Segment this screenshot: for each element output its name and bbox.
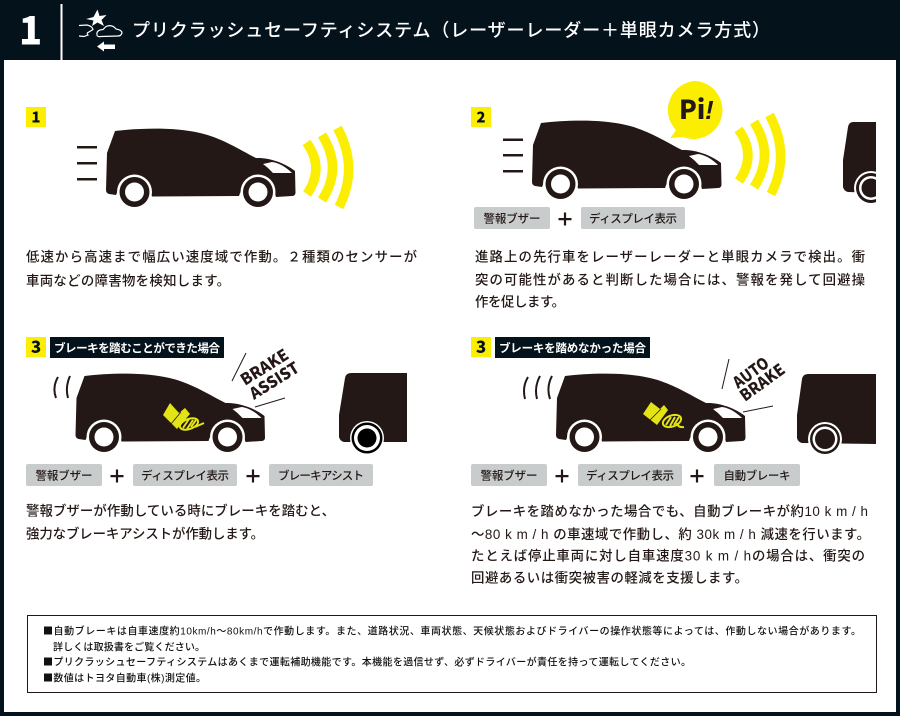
panel: step 2 [471, 81, 888, 310]
tag: auto brake: 自動ブレーキ [724, 468, 790, 482]
speed lines [503, 138, 523, 172]
pedal icon [163, 403, 204, 432]
panel: step 1 [26, 106, 418, 288]
tag: display [578, 464, 682, 486]
speech bubble: Pi!: Pi [679, 90, 705, 127]
speech bubble: Pi! [668, 81, 722, 139]
subheading: ブレーキを踏むことができた場合 [54, 341, 220, 355]
description: ブレーキを踏めなかった場合でも、自動ブレーキが約10 k m / h [471, 503, 868, 519]
AUTO BRAKE label [722, 350, 789, 412]
description: 強力なブレーキアシストが作動します。 [26, 526, 264, 542]
section number: 1 [19, 0, 42, 56]
badge 2 [471, 106, 491, 128]
tag: alarm buzzer: 警報ブザー [480, 468, 538, 482]
subheading [495, 337, 650, 358]
description [26, 502, 335, 542]
description: 車両などの障害物を検知します。 [26, 272, 230, 288]
BRAKE ASSIST label: ASSIST [243, 355, 303, 405]
icon: pre-crash system [79, 10, 122, 52]
car [556, 374, 746, 454]
plus [246, 470, 260, 482]
badge 3 [471, 333, 491, 358]
badge 3: 3 [476, 333, 486, 358]
badge 1 [26, 106, 46, 128]
tag: auto brake [714, 464, 800, 486]
tag: display [133, 464, 237, 486]
panel: step 3 brake not applied [471, 333, 880, 586]
tag: alarm buzzer: 警報ブザー [36, 468, 92, 482]
tag: brake assist: ブレーキアシスト [278, 468, 364, 482]
pedal icon [643, 402, 684, 429]
title: プリクラッシュセーフティシステム（レーザーレーダー＋単眼カメラ方式） [132, 20, 770, 40]
description: 作を促します。 [475, 294, 565, 310]
plus [110, 470, 124, 482]
AUTO BRAKE label: AUTO [726, 350, 773, 394]
vehicle ahead [797, 374, 880, 456]
notes box: 詳しくは取扱書をご覧ください。 [53, 640, 205, 654]
BRAKE ASSIST label: BRAKE [235, 342, 293, 390]
badge 1: 1 [31, 106, 41, 128]
car [76, 374, 265, 454]
plus [556, 470, 568, 482]
description: 回避あるいは衝突被害の軽減を支援します。 [471, 570, 748, 586]
tag: brake assist [269, 464, 373, 486]
badge 3 [26, 333, 46, 358]
subheading: ブレーキを踏めなかった場合 [499, 341, 646, 355]
badge 2: 2 [476, 106, 486, 128]
tag: alarm buzzer: 警報ブザー [484, 212, 540, 226]
speech bubble: Pi!: ! [705, 95, 714, 125]
plus [690, 470, 704, 482]
car [106, 129, 296, 210]
BRAKE ASSIST label [232, 342, 303, 407]
tag: display: ディスプレイ表示 [589, 212, 677, 226]
tag: display [581, 207, 685, 229]
description [471, 503, 870, 586]
vehicle ahead [843, 122, 876, 203]
tag: alarm buzzer [26, 464, 102, 486]
AUTO BRAKE label: BRAKE [734, 357, 789, 406]
description: 進路上の先行車をレーザーレーダーと単眼カメラで検出。衝 [475, 248, 865, 264]
car [532, 121, 722, 202]
notes box: ■数値はトヨタ自動車(株)測定値。 [43, 670, 206, 684]
badge 3: 3 [31, 333, 41, 358]
description: ～80 k m / h の車速域で作動し、約 30k m / h 減速を行います。 [471, 526, 870, 542]
motion arcs [524, 376, 552, 399]
subheading [50, 337, 224, 358]
tag: alarm buzzer [474, 207, 550, 229]
description [475, 248, 866, 310]
tag: display: ディスプレイ表示 [141, 468, 229, 482]
notes box: ■プリクラッシュセーフティシステムはあくまで運転補助機能です。本機能を過信せず、必ずドライバーが責任を持って運転してください。 [43, 654, 691, 668]
motion arcs [54, 376, 70, 398]
notes box: ■自動ブレーキは自車速度約10km/h～80km/hで作動します。また、道路状況、車両状態、天候状態およびドライバーの操作状態等によっては、作動しない場合があります。 [43, 622, 861, 638]
speed lines [77, 146, 97, 180]
tag: display: ディスプレイ表示 [586, 468, 674, 482]
header bar [19, 0, 770, 60]
plus [558, 212, 572, 226]
panel: step 3 brake applied [26, 333, 407, 542]
radar waves [306, 128, 349, 207]
tag: alarm buzzer [471, 464, 547, 486]
description: 警報ブザーが作動している時にブレーキを踏むと、 [26, 502, 335, 518]
radar waves [738, 115, 781, 194]
description: 突の可能性があると判断した場合には、警報を発して回避操 [475, 272, 866, 288]
description [26, 248, 418, 288]
vehicle ahead [339, 373, 407, 455]
description: たとえば停止車両に対し自車速度30 k m / hの場合は、衝突の [471, 548, 865, 564]
notes box [28, 616, 876, 692]
description: 低速から高速まで幅広い速度域で作動。２種類のセンサーが [26, 248, 418, 264]
